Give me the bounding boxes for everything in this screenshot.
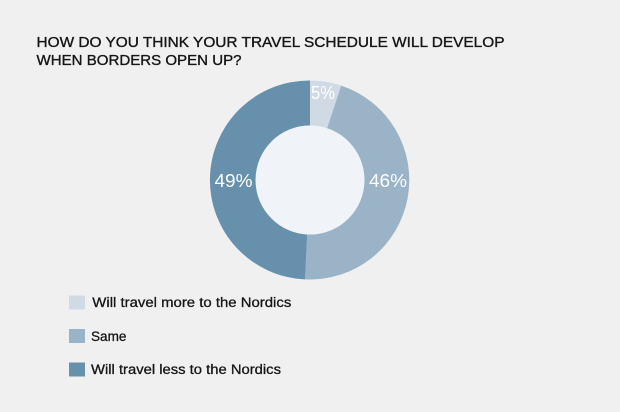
legend item: same: Same — [91, 329, 126, 344]
slice: will travel more 5% — [310, 80, 341, 128]
title — [36, 35, 505, 69]
legend — [69, 295, 292, 377]
value label 5%: 5% — [311, 83, 335, 103]
value label 46%: 46% — [369, 171, 407, 191]
legend item: will travel more: Will travel more to the Nordics — [92, 295, 292, 310]
title: WHEN BORDERS OPEN UP? — [36, 53, 242, 69]
value label 49%: 49% — [214, 171, 252, 191]
donut centre — [256, 126, 364, 234]
slice: will travel less 49% — [210, 80, 310, 279]
slice: same 46% — [305, 86, 409, 280]
legend item: same — [69, 329, 126, 344]
legend item: will travel less: Will travel less to the Nordics — [91, 362, 281, 377]
donut chart — [210, 80, 409, 280]
title: HOW DO YOU THINK YOUR TRAVEL SCHEDULE WILL DEVELOP — [36, 35, 505, 51]
